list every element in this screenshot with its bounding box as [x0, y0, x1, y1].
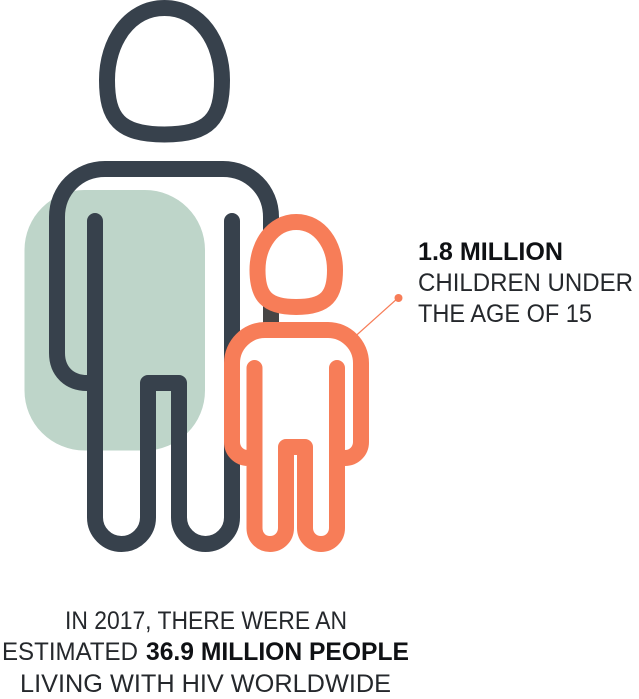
icon: child figure	[232, 222, 361, 544]
icon: adult figure	[57, 8, 271, 544]
green background panel	[24, 190, 205, 450]
caption: 36.9 million people	[2, 607, 409, 698]
adult body and legs	[57, 169, 271, 544]
child head	[258, 222, 335, 307]
child body and legs	[232, 330, 361, 544]
callout text: 1.8 million children: 1.8 MILLION	[418, 238, 563, 266]
callout text: 1.8 million children	[418, 238, 633, 328]
callout text: 1.8 million children: THE AGE OF 15	[418, 300, 592, 328]
caption: 36.9 million people: 36.9 MILLION PEOPLE	[146, 638, 409, 666]
caption: 36.9 million people: LIVING WITH HIV WORLDWIDE	[20, 670, 391, 698]
callout leader line	[350, 294, 402, 341]
caption: 36.9 million people: ESTIMATED	[2, 638, 138, 666]
callout text: 1.8 million children: CHILDREN UNDER	[418, 269, 633, 297]
adult head	[107, 8, 222, 134]
adult arm overlap segment	[263, 308, 279, 324]
caption: 36.9 million people: IN 2017, THERE WERE AN	[65, 607, 347, 635]
